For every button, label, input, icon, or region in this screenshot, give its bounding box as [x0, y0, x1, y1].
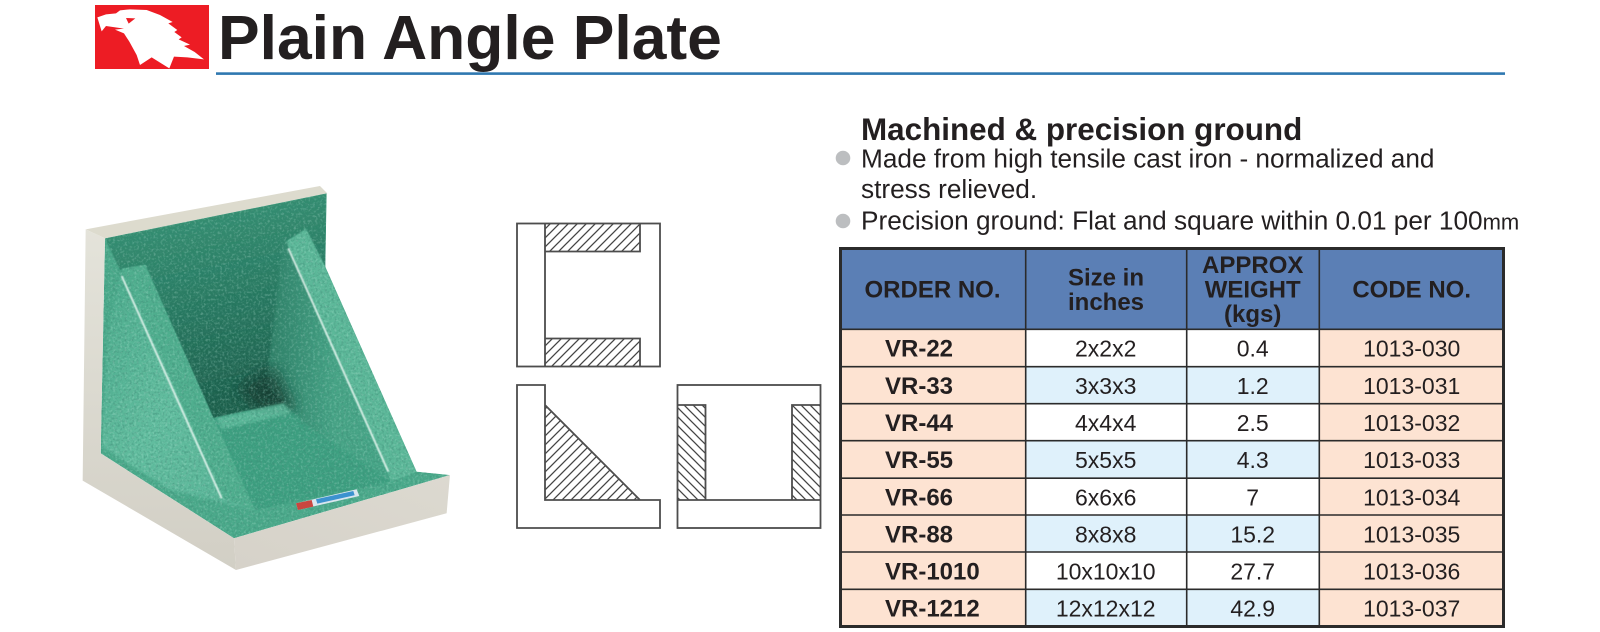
feature bullet 1: stress relieved.	[861, 174, 1037, 204]
row VR-33	[885, 373, 1460, 400]
row VR-55: 1013-033	[1363, 447, 1460, 473]
feature bullet 2: Precision ground: Flat and square within 0.01 per 100mm	[861, 206, 1519, 236]
row VR-44: 1013-032	[1363, 410, 1460, 436]
table header row: Size in	[1068, 264, 1144, 292]
row VR-33: 3x3x3	[1075, 373, 1136, 399]
row VR-1212: 1013-037	[1363, 596, 1460, 622]
row VR-1010	[885, 558, 1460, 585]
title: Plain Angle Plate	[218, 4, 722, 73]
row VR-66: 6x6x6	[1075, 484, 1136, 510]
row VR-22: 1013-030	[1363, 336, 1460, 362]
row VR-1212	[885, 596, 1460, 623]
row VR-44: 4x4x4	[1075, 410, 1137, 436]
heading: machined and precision ground: Machined & precision ground	[861, 112, 1302, 147]
title underline	[216, 72, 1505, 75]
rib highlights	[122, 248, 388, 498]
table header row: WEIGHT	[1205, 276, 1301, 304]
table header row: CODE NO.	[1352, 276, 1471, 304]
table header row: APPROX	[1202, 252, 1303, 279]
row VR-22: 2x2x2	[1075, 336, 1136, 362]
green casting body	[100, 194, 450, 538]
row VR-1010: 27.7	[1230, 558, 1275, 584]
row VR-1010: 1013-036	[1363, 558, 1460, 584]
technical drawing: top view	[517, 224, 660, 366]
row VR-44	[885, 410, 1460, 437]
row VR-66	[885, 484, 1461, 511]
row VR-44: 2.5	[1237, 410, 1269, 436]
row VR-88: 1013-035	[1363, 521, 1460, 547]
row VR-1212: VR-1212	[885, 596, 980, 623]
row VR-1212: 12x12x12	[1056, 596, 1156, 622]
small maker label	[296, 489, 359, 510]
product photo: green cast angle plate	[70, 170, 450, 570]
row VR-22: 0.4	[1237, 336, 1269, 362]
top edge of back plate	[86, 186, 327, 238]
specification table	[840, 248, 1504, 627]
feature bullet 1	[836, 144, 1434, 204]
row VR-33: 1013-031	[1363, 373, 1460, 399]
table header row	[840, 248, 1504, 329]
row VR-1010: 10x10x10	[1056, 558, 1156, 584]
machined front face of base	[234, 475, 450, 570]
row VR-55: 4.3	[1237, 447, 1269, 473]
technical drawing: front section view	[678, 385, 820, 528]
row VR-33: VR-33	[885, 373, 953, 400]
row VR-22: VR-22	[885, 336, 953, 363]
row VR-33: 1.2	[1237, 373, 1269, 399]
technical drawing: side section view	[517, 385, 660, 528]
table row backgrounds	[840, 329, 1504, 627]
row VR-55: 5x5x5	[1075, 447, 1136, 473]
logo: red eagle badge	[95, 5, 209, 69]
row VR-22	[885, 336, 1460, 363]
row VR-88: VR-88	[885, 521, 953, 548]
row VR-88	[885, 521, 1460, 548]
row VR-66: 1013-034	[1363, 484, 1461, 510]
table header row: (kgs)	[1224, 301, 1281, 328]
row VR-44: VR-44	[885, 410, 954, 437]
row VR-66: 7	[1246, 484, 1259, 510]
machined left face	[83, 229, 236, 570]
table header row: inches	[1068, 289, 1144, 316]
feature bullet 1: Made from high tensile cast iron - normalized and	[861, 144, 1434, 174]
row VR-88: 8x8x8	[1075, 521, 1136, 547]
row VR-55: VR-55	[885, 447, 953, 474]
row VR-55	[885, 447, 1460, 474]
table header row: ORDER NO.	[864, 276, 1001, 304]
row VR-1212: 42.9	[1230, 596, 1275, 622]
row VR-1010: VR-1010	[885, 558, 980, 585]
row VR-88: 15.2	[1230, 521, 1275, 547]
row VR-66: VR-66	[885, 484, 953, 511]
